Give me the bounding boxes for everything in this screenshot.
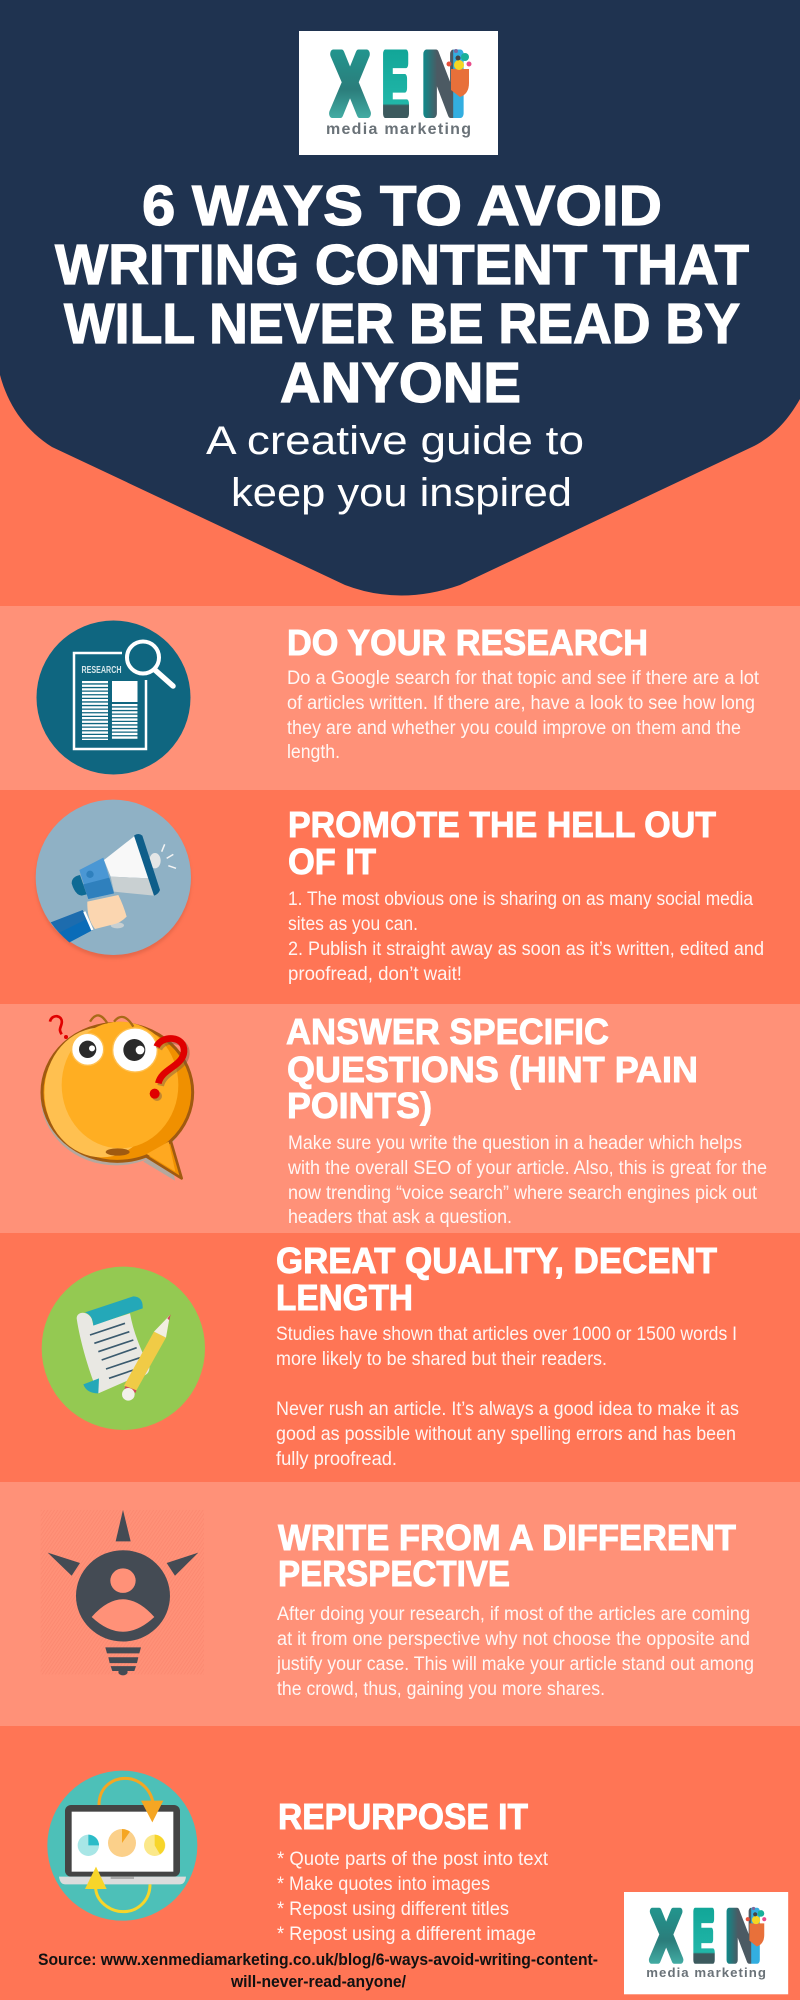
heading: answer specific questions: QUESTIONS (HINT PAIN: [287, 1049, 698, 1090]
panel: header background: [0, 0, 800, 606]
icon: research newspaper and magnifier: RESEARCH: [82, 664, 122, 676]
text block: answer: with the overall SEO of your article. Also, this is great for the: [287, 1158, 767, 1179]
logo: Xen Media Marketing top: [299, 31, 498, 155]
logo: Xen Media Marketing top: N: [422, 36, 464, 132]
text block: different perspective: [276, 1604, 754, 1700]
text block: different perspective: After doing your research, if most of the articles are coming: [277, 1604, 750, 1625]
logo: Xen Media Marketing top: E: [382, 36, 408, 132]
logo: Xen Media Marketing bottom: [624, 1892, 788, 1994]
icon: scroll and pencil: [42, 1267, 205, 1430]
text block: answer: [287, 1133, 767, 1228]
heading: great quality: [276, 1240, 717, 1318]
heading: promote: PROMOTE THE HELL OUT: [288, 804, 716, 845]
icon: research newspaper and magnifier: [36, 620, 190, 774]
subtitle: A creative guide to: [206, 419, 584, 463]
title: 6 WAYS TO AVOID: [142, 174, 662, 238]
text block: research: of articles written. If there are, have a look to see how long: [287, 693, 755, 714]
heading: answer specific questions: ANSWER SPECIFIC: [286, 1011, 609, 1052]
heading: repurpose it: REPURPOSE IT: [278, 1796, 528, 1837]
text block: great quality: more likely to be shared but their readers.: [276, 1349, 607, 1370]
text block: answer: headers that ask a question.: [288, 1207, 512, 1228]
source credit: [38, 1950, 598, 1991]
logo: Xen Media Marketing top: media marketing: [326, 121, 471, 138]
logo: Xen Media Marketing bottom: media marketing: [646, 1965, 766, 1980]
source credit: will-never-read-anyone/: [230, 1972, 406, 1991]
icon: confused speech bubble face: [41, 1015, 193, 1181]
text block: repurpose list: * Repost using a different image: [277, 1924, 536, 1945]
heading: great quality: LENGTH: [276, 1277, 413, 1318]
source credit: Source: www.xenmediamarketing.co.uk/blog/6-ways-avoid-writing-content-: [38, 1950, 598, 1969]
heading: promote: OF IT: [288, 841, 376, 882]
logo: Xen Media Marketing top: X: [332, 36, 368, 132]
text block: promote: sites as you can.: [288, 914, 418, 935]
panel: different perspective: [0, 1482, 800, 1726]
text block: research: [287, 668, 760, 763]
heading: different perspective: [278, 1517, 736, 1594]
text block: research: Do a Google search for that topic and see if there are a lot: [287, 668, 760, 689]
heading: do your research: DO YOUR RESEARCH: [287, 622, 648, 663]
panel: promote: [0, 790, 800, 1004]
text block: great quality: good as possible without any spelling errors and has been: [276, 1424, 736, 1445]
logo: Xen Media Marketing bottom: N: [726, 1897, 761, 1976]
text block: promote: proofread, don’t wait!: [288, 964, 462, 985]
text block: repurpose list: [277, 1849, 549, 1945]
panel: great quality: [0, 1233, 800, 1482]
icon: megaphone: [36, 800, 191, 958]
panel: answer specific questions: [0, 1004, 800, 1233]
title: WRITING CONTENT THAT: [55, 233, 749, 297]
heading: answer specific questions: [286, 1011, 698, 1126]
icon: person light bulb: [41, 1510, 204, 1675]
text block: great quality: Never rush an article. It’s always a good idea to make it as: [276, 1399, 739, 1420]
text block: great quality: fully proofread.: [276, 1449, 397, 1470]
subtitle: keep you inspired: [231, 471, 572, 515]
text block: research: length.: [287, 742, 340, 763]
text block: answer: Make sure you write the question in a header which helps: [288, 1133, 742, 1154]
text block: promote: 1. The most obvious one is sharing on as many social media: [288, 889, 753, 910]
text block: research: they are and whether you could improve on them and the: [287, 718, 741, 739]
panel: repurpose it: [0, 1726, 800, 2000]
title: [55, 174, 749, 415]
icon: laptop with repurpose arrows: [47, 1771, 197, 1921]
heading: promote: [288, 804, 716, 882]
logo: Xen Media Marketing bottom: X: [651, 1897, 681, 1976]
title: WILL NEVER BE READ BY: [64, 292, 740, 356]
heading: different perspective: WRITE FROM A DIFFERENT: [278, 1517, 736, 1558]
text block: repurpose list: * Make quotes into images: [277, 1874, 490, 1895]
logo: Xen Media Marketing bottom: E: [693, 1897, 714, 1976]
text block: repurpose list: * Quote parts of the post into text: [277, 1849, 549, 1870]
text block: great quality: [276, 1324, 739, 1470]
subtitle: [206, 419, 584, 515]
text block: answer: now trending “voice search” where search engines pick out: [288, 1183, 758, 1204]
heading: different perspective: PERSPECTIVE: [278, 1553, 510, 1594]
text block: promote: [288, 889, 764, 985]
title: ANYONE: [280, 351, 521, 415]
text block: different perspective: the crowd, thus, gaining you more shares.: [277, 1679, 605, 1700]
text block: different perspective: at it from one perspective why not choose the opposite and: [277, 1629, 750, 1650]
text block: different perspective: justify your case. This will make your article stand out among: [276, 1654, 754, 1675]
text block: repurpose list: * Repost using different titles: [277, 1899, 509, 1920]
heading: answer specific questions: POINTS): [287, 1085, 432, 1126]
heading: great quality: GREAT QUALITY, DECENT: [276, 1240, 717, 1281]
text block: promote: 2. Publish it straight away as soon as it’s written, edited and: [288, 939, 764, 960]
text block: great quality: Studies have shown that articles over 1000 or 1500 words I: [276, 1324, 737, 1345]
panel: do your research: [0, 606, 800, 790]
